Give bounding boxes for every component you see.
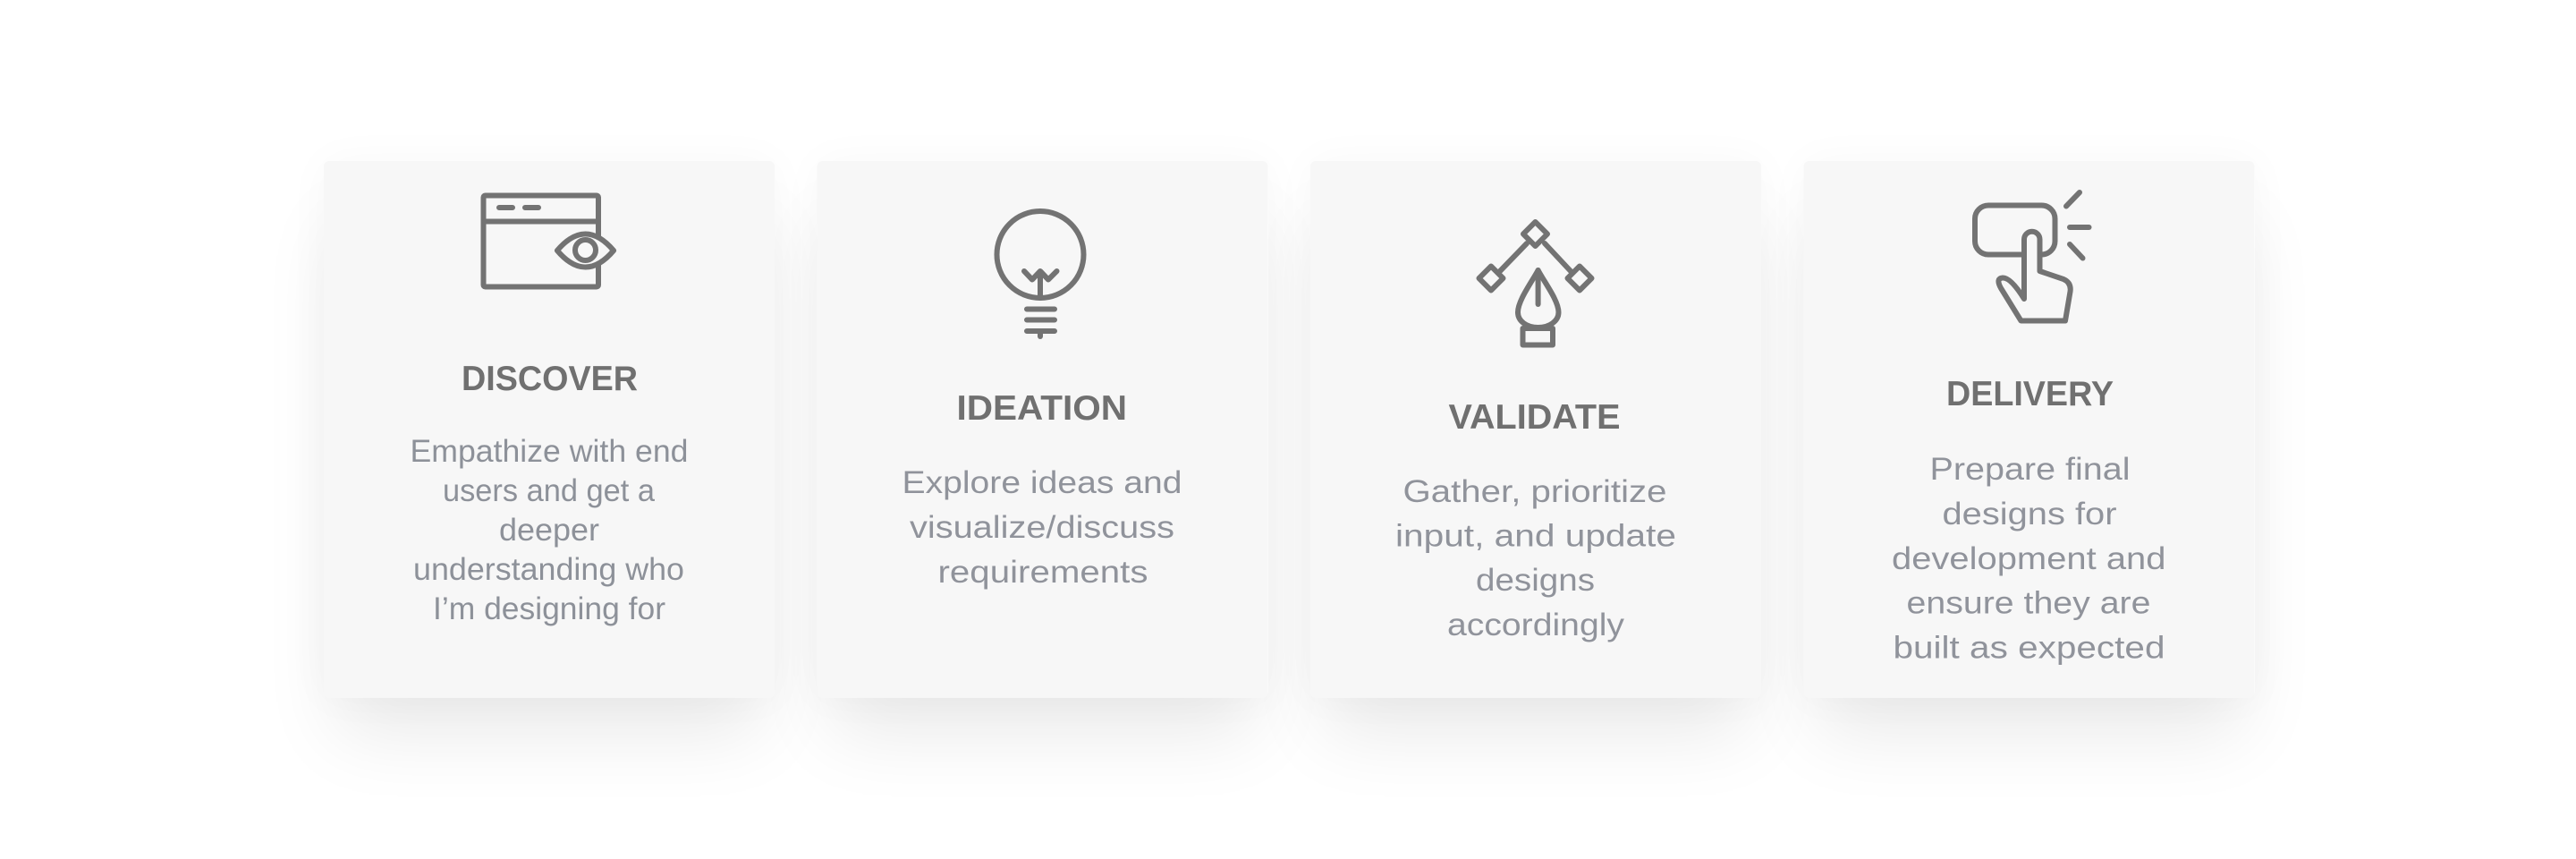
text block: validate description: input, and update — [1395, 517, 1676, 553]
text block: discover description: users and get a — [443, 473, 656, 508]
panel: delivery — [1803, 161, 2254, 698]
text block: validate description: designs — [1476, 562, 1595, 598]
text block: delivery description — [1892, 451, 2166, 666]
text block: discover description — [410, 434, 689, 626]
text block: discover description: deeper — [499, 513, 599, 548]
text block: delivery description: development and — [1892, 540, 2166, 576]
text block: validate description: accordingly — [1447, 607, 1624, 642]
text block: ideation description: visualize/discuss — [910, 509, 1174, 545]
text block: delivery description: Prepare final — [1930, 451, 2131, 487]
text block: validate description: Gather, prioritize — [1402, 473, 1667, 509]
panel: validate — [1310, 161, 1761, 698]
heading: IDEATION: IDEATION — [957, 389, 1127, 428]
text block: delivery description: designs for — [1943, 496, 2117, 532]
panel: discover — [324, 161, 775, 698]
text block: discover description: I’m designing for — [433, 591, 665, 626]
text block: ideation description: requirements — [937, 554, 1148, 590]
heading: VALIDATE: VALIDATE — [1449, 398, 1621, 437]
icon: pen tool with anchor points — [1479, 222, 1592, 345]
text block: ideation description: Explore ideas and — [902, 464, 1182, 500]
text block: discover description: Empathize with end — [410, 434, 689, 469]
panel: ideation — [818, 161, 1268, 698]
heading: DISCOVER: DISCOVER — [462, 360, 638, 398]
text block: ideation description — [902, 464, 1182, 590]
text block: delivery description: built as expected — [1893, 630, 2165, 666]
text block: discover description: understanding who — [413, 552, 684, 587]
text block: delivery description: ensure they are — [1907, 585, 2150, 621]
icon: light bulb — [996, 211, 1084, 336]
text block: validate description — [1395, 473, 1676, 642]
icon: hand pressing button — [1975, 192, 2089, 320]
heading: DELIVERY: DELIVERY — [1946, 375, 2114, 413]
icon: browser window with eye — [483, 195, 614, 286]
